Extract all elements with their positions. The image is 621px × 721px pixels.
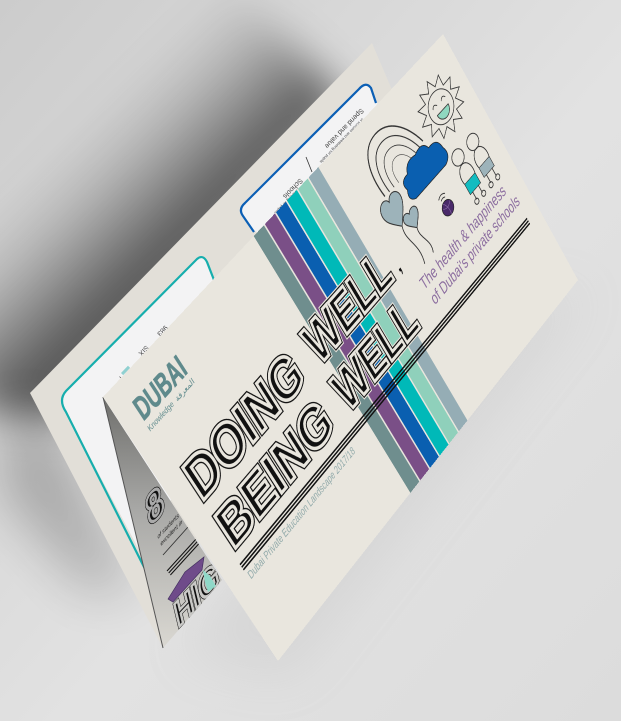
thin rule xyxy=(163,527,188,555)
numeral 8: 8 xyxy=(142,478,167,535)
divider and small text on blue panel: Schools xyxy=(281,177,304,200)
icon: rainbow xyxy=(358,105,428,198)
title: DOING WELL, BEING WELL: WELL xyxy=(354,325,487,467)
colour stripes xyxy=(254,167,467,493)
title: DOING WELL, BEING WELL: WELL xyxy=(318,267,453,411)
small caption: excellent in xyxy=(160,518,183,548)
panel: folded inner flap xyxy=(103,397,222,648)
icon: graduation cap xyxy=(168,557,216,602)
title: DOING WELL, BEING WELL: DOING xyxy=(179,365,340,532)
title: DOING WELL, BEING WELL: DOING xyxy=(179,365,340,532)
numeral 8: 8 xyxy=(142,478,167,535)
title: DOING WELL, BEING WELL xyxy=(174,229,436,561)
title: DOING WELL, BEING WELL: DOING xyxy=(179,365,340,532)
title: DOING WELL, BEING WELL: , xyxy=(438,284,460,315)
divider and small text on blue panel xyxy=(274,107,365,215)
panel: back card xyxy=(30,43,392,648)
small numbers on teal panel: SIX xyxy=(136,344,150,357)
logo: Dubai Knowledge: المعرفة xyxy=(177,388,204,416)
small numbers on teal panel: 983 xyxy=(155,324,169,337)
back card and inner flap xyxy=(30,44,382,648)
title: DOING WELL, BEING WELL: WELL xyxy=(354,325,487,467)
title: DOING WELL, BEING WELL: BEING xyxy=(214,421,375,587)
subtitle: report name: Dubai Private Education Landscape 2017/18 xyxy=(257,488,394,612)
title: DOING WELL, BEING WELL: WELL xyxy=(354,325,487,467)
title: DOING WELL, BEING WELL: WELL xyxy=(318,267,453,411)
title: DOING WELL, BEING WELL: BEING xyxy=(214,421,375,587)
icon: blue cloud xyxy=(396,131,451,203)
tagline xyxy=(417,175,522,310)
icon: heart balloons xyxy=(377,181,439,274)
heading HIG outlined: HIG xyxy=(171,555,222,636)
icon: sun xyxy=(408,62,473,152)
logo: Dubai Knowledge: Knowledge xyxy=(148,409,180,441)
icon: purple ball xyxy=(436,190,456,219)
triple rule under title xyxy=(240,218,530,571)
panel: front cover xyxy=(103,34,578,660)
divider and small text on blue panel: Spend and value xyxy=(323,107,365,149)
heading HIG outlined: HIG xyxy=(171,555,222,636)
title: DOING WELL, BEING WELL: BEING xyxy=(214,421,375,587)
tagline: The health & happiness xyxy=(476,215,578,336)
logo: Dubai Knowledge: DUBAI xyxy=(129,359,199,435)
numeral 8: 8 xyxy=(142,478,167,535)
panel: blue framed page xyxy=(241,85,378,240)
divider and small text on blue panel: of schools and wellbeing for pupils xyxy=(319,117,365,164)
small caption: of students xyxy=(157,512,180,541)
title: DOING WELL, BEING WELL: WELL xyxy=(318,267,453,411)
title: DOING WELL, BEING WELL: BEING xyxy=(214,421,375,587)
icon: two children xyxy=(449,128,501,206)
title: DOING WELL, BEING WELL: WELL xyxy=(354,325,487,467)
title: DOING WELL, BEING WELL: DOING xyxy=(179,365,340,532)
small numbers on teal panel xyxy=(117,324,169,381)
panel: teal framed page xyxy=(62,257,214,580)
fold line xyxy=(103,397,163,648)
divider and small text on blue panel: wellbeing for pupils xyxy=(274,187,301,215)
numeral 8 xyxy=(145,486,164,524)
logo: Dubai Knowledge xyxy=(128,349,196,434)
triple rule xyxy=(167,538,200,575)
title: DOING WELL, BEING WELL: WELL xyxy=(318,267,453,411)
heading HIG outlined: HIG xyxy=(171,555,222,636)
small numbers on teal panel: l xyxy=(117,375,124,381)
tagline: of Dubai's private schools xyxy=(490,229,578,355)
